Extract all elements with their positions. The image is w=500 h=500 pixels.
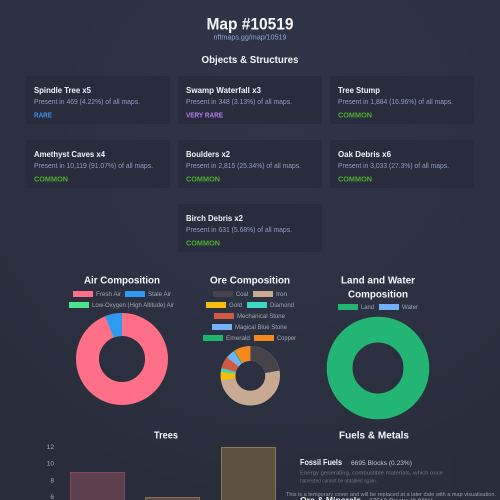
- card: ore and minerals: [300, 496, 433, 500]
- card: oak debris: Present in 3,033 (27.3%) of all maps.: [338, 161, 449, 170]
- bar: yellow: [222, 448, 276, 500]
- card: swamp waterfall: [178, 76, 322, 124]
- legend: ore: Emerald: [226, 335, 251, 342]
- legend: ore: Mechanical Stone: [237, 313, 286, 320]
- card: birch debris: COMMON: [186, 240, 220, 248]
- card: fossil fuels: 6695 Blocks (0.23%): [351, 460, 412, 467]
- heading: ore composition: Ore Composition: [210, 276, 290, 286]
- card: amethyst caves: [26, 140, 170, 188]
- card: swamp waterfall: Present in 348 (3.13%) of all maps.: [186, 97, 292, 106]
- heading: objects and structures: Objects & Structures: [202, 55, 299, 66]
- map link: nftmaps.gg/map/10519: [214, 32, 286, 42]
- card: boulders: COMMON: [186, 176, 220, 184]
- card: spindle tree: [26, 76, 170, 124]
- legend: air: Fresh Air: [96, 291, 121, 298]
- legend: land and water: Land: [361, 304, 375, 311]
- legend: ore: Magical Blue Stone: [235, 324, 288, 331]
- card: tree stump: COMMON: [338, 112, 372, 120]
- title: Map #10519: [206, 16, 294, 34]
- card: amethyst caves: COMMON: [34, 176, 68, 184]
- legend: ore: Gold: [229, 302, 243, 309]
- card: swamp waterfall: VERY RARE: [186, 112, 223, 120]
- heading: land and water composition, second line: Composition: [348, 290, 408, 300]
- legend: ore: [203, 291, 296, 342]
- donut chart: air: [88, 324, 156, 394]
- donut chart: land and water: [340, 330, 416, 406]
- card: fossil fuels: Fossil Fuels: [300, 458, 342, 467]
- card: tree stump: Present in 1,884 (16.96%) of all maps.: [338, 97, 453, 106]
- card: birch debris: Present in 631 (5.68%) of all maps.: [186, 225, 292, 234]
- card: oak debris: Oak Debris x6: [338, 150, 391, 159]
- card: birch debris: [178, 204, 322, 252]
- card: fossil fuels: harvested cannot be obtained again.: [300, 478, 377, 484]
- card: fossil fuels: Energy generating, combustible materials, which once: [300, 470, 444, 476]
- y axis labels: 8: [50, 478, 54, 484]
- y axis labels: 10: [47, 460, 54, 468]
- heading: land and water composition: Land and Water: [341, 276, 415, 286]
- heading: fuels and metals: Fuels & Metals: [339, 430, 409, 442]
- card: amethyst caves: Present in 10,119 (91.07%) of all maps.: [34, 161, 153, 170]
- heading: air composition: Air Composition: [84, 276, 160, 286]
- legend: air: Stale Air: [148, 291, 171, 298]
- bar: orange: [146, 498, 200, 500]
- card: oak debris: COMMON: [338, 176, 372, 184]
- card: spindle tree: Present in 469 (4.22%) of all maps.: [34, 97, 140, 106]
- card: spindle tree: Spindle Tree x5: [34, 86, 91, 95]
- y axis labels: 12: [47, 444, 54, 451]
- panel: objects and structures cards: [26, 76, 474, 252]
- legend: air: Low-Oxygen (High Altitude) Air: [92, 302, 174, 309]
- donut chart: ore: [228, 354, 273, 398]
- card: birch debris: Birch Debris x2: [186, 214, 243, 223]
- legend: ore: Diamond: [270, 302, 295, 309]
- heading: trees: Trees: [154, 430, 178, 442]
- panel: trees bar chart: [47, 430, 276, 500]
- legend: air: [69, 291, 174, 309]
- card: oak debris: [330, 140, 474, 188]
- card: swamp waterfall: Swamp Waterfall x3: [186, 86, 261, 95]
- card: fossil fuels: [292, 451, 450, 500]
- card: spindle tree: RARE: [34, 112, 52, 120]
- legend: ore: Iron: [276, 291, 288, 298]
- panel: land and water composition: [338, 276, 418, 406]
- panel: air composition: [69, 276, 174, 394]
- bar: red: [70, 472, 124, 500]
- card: tree stump: Tree Stump: [338, 86, 380, 95]
- card: boulders: Present in 2,815 (25.34%) of all maps.: [186, 161, 301, 170]
- card: tree stump: [330, 76, 474, 124]
- card: boulders: [178, 140, 322, 188]
- legend: land and water: Water: [402, 304, 418, 311]
- panel: fuels and metals: [292, 430, 450, 500]
- y axis labels: [47, 444, 54, 500]
- legend: land and water: [338, 304, 418, 311]
- panel: ore composition: [203, 276, 296, 398]
- legend: ore: Copper: [277, 335, 296, 342]
- card: amethyst caves: Amethyst Caves x4: [34, 150, 105, 159]
- legend: ore: Coal: [236, 291, 248, 298]
- card: boulders: Boulders x2: [186, 150, 230, 159]
